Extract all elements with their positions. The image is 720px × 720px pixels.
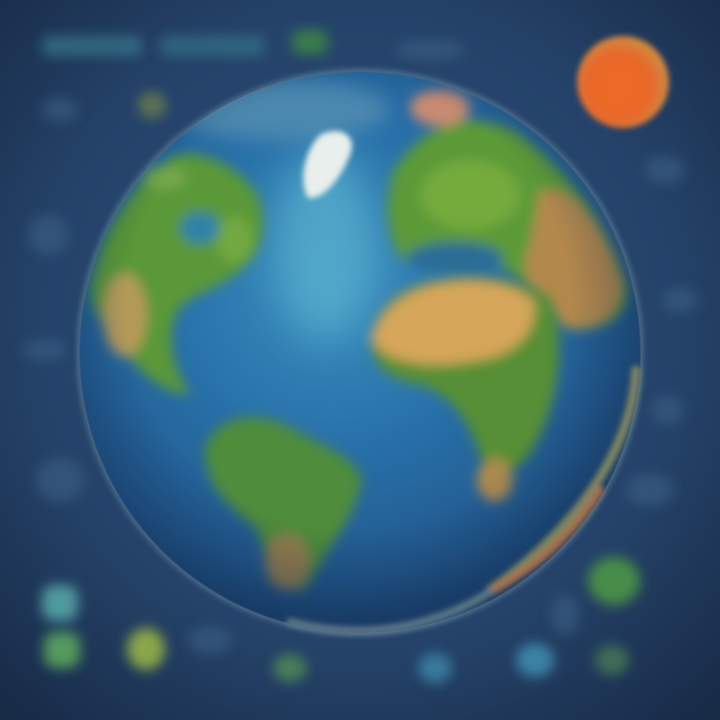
rim arc: [290, 370, 636, 631]
icon: small olive marker: [138, 92, 166, 118]
continent: europe and asia: [388, 90, 628, 330]
cloud: [303, 131, 352, 198]
icon: green small: [273, 654, 307, 682]
icon: dim green: [595, 645, 629, 675]
title: [42, 30, 328, 56]
globe: [77, 69, 643, 635]
light water column: [275, 150, 375, 340]
icon: stacked teal and green: [42, 585, 80, 668]
icon: yellow green: [127, 628, 165, 670]
icon: green circle: [588, 557, 640, 605]
faint side labels: [23, 40, 698, 654]
icons: bottom row: [42, 557, 640, 683]
icon: blue small: [418, 653, 452, 683]
continent: north america: [90, 154, 263, 395]
icon: blue: [516, 643, 554, 677]
continent: africa: [370, 277, 559, 502]
sun: [577, 36, 669, 128]
continent: south america: [205, 417, 362, 590]
shading: [79, 71, 641, 633]
